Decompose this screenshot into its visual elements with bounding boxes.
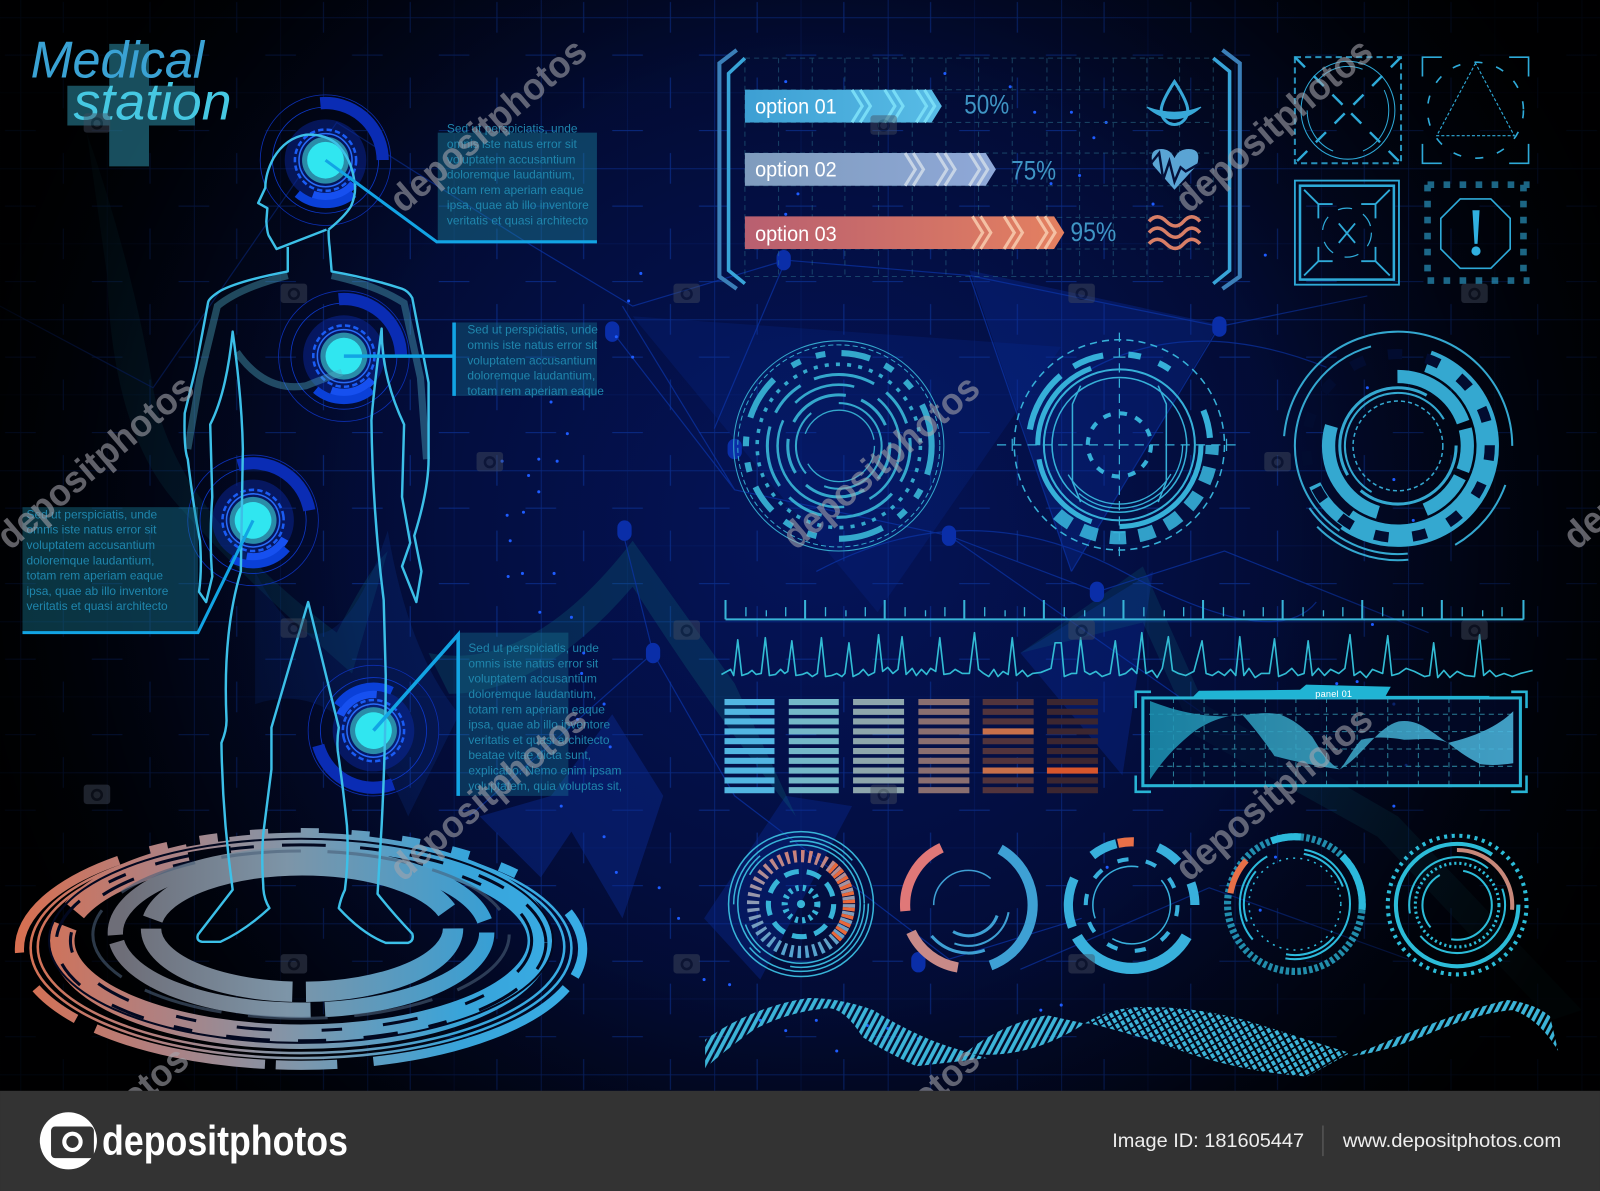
callout 3 text: ipsa, quae ab illo inventore (27, 584, 169, 598)
bar: option 03: option 03 (755, 222, 837, 246)
callout 4 text: Sed ut perspiciatis, unde (468, 641, 599, 655)
level bars (724, 702, 1098, 790)
stock watermark text: depositphotos (381, 29, 594, 220)
options panel (719, 50, 1240, 289)
stock watermark text: depositphotos (381, 698, 594, 889)
callout 3 text: Sed ut perspiciatis, unde (27, 507, 157, 521)
bar: option 03 (745, 216, 1064, 249)
ring gauge 3 (1043, 816, 1220, 994)
callout 3 text: veritatis et quasi architecto (27, 599, 168, 613)
callout 4 text: totam rem aperiam eaque (468, 702, 605, 716)
bar: option 01 (745, 90, 942, 122)
stock watermark text: depositphotos (1167, 29, 1380, 220)
callout 2 text: totam rem aperiam eaque (467, 384, 604, 398)
hub targets (177, 95, 453, 811)
callout 1 text: totam rem aperiam eaque (447, 183, 584, 197)
panel brackets (719, 50, 1240, 289)
gear gauge C (1254, 302, 1541, 589)
callout 1 (326, 122, 597, 242)
ring gauge 5 (1388, 836, 1527, 974)
level column 1 (724, 702, 774, 790)
network particles (502, 73, 1449, 1051)
target box: square (1295, 181, 1399, 285)
level column 3 (853, 702, 904, 790)
ECG trace (721, 633, 1533, 678)
callout 3 text: voluptatem accusantium (27, 538, 155, 552)
icon: waves (1149, 217, 1200, 248)
icon: heart (1151, 149, 1200, 190)
callout 4 text: explicabo. Nemo enim ipsam (468, 763, 622, 777)
callout 2 text: Sed ut perspiciatis, unde (467, 323, 598, 337)
callout 4 text: beatae vitae dicta sunt, (468, 748, 591, 762)
callout 4 text: doloremque laudantium, (468, 687, 596, 701)
title: Medical station: Medical (31, 32, 205, 90)
bar: option 01: option 01 (755, 94, 837, 118)
logo wordmark: depositphotos (102, 1117, 348, 1164)
ring gauge 1 (729, 832, 873, 977)
value 50%: 50% (964, 89, 1009, 119)
ruler (726, 600, 1523, 619)
level column 4 (918, 702, 969, 790)
callout 1 text: omnis iste natus error sit (447, 137, 577, 151)
callout 1 text: Sed ut perspiciatis, unde (447, 122, 578, 136)
callout 4 (373, 633, 622, 796)
site url: www.depositphotos.com (1342, 1130, 1561, 1152)
callout 3 (22, 507, 253, 633)
callout 1 text: veritatis et quasi architecto (447, 213, 588, 227)
shoulder and chest shading (188, 276, 427, 459)
ring gauge 2 (881, 817, 1056, 993)
crosshair gauge B (997, 333, 1242, 557)
ring gauge 4 (1200, 809, 1390, 999)
target box: triangle (1422, 57, 1529, 163)
callout 3 text: doloremque laudantium, (27, 553, 154, 567)
wave panel (1136, 685, 1527, 792)
stock watermark text: depositphotos (774, 366, 987, 557)
title: Medical station (31, 32, 232, 166)
warning box (1428, 185, 1530, 281)
callout 1 text: voluptatem accusantium (447, 152, 576, 166)
footer bar (0, 1091, 1600, 1191)
panel grid (745, 58, 1213, 277)
stock watermark cameras (84, 113, 1488, 973)
callout 1 text: doloremque laudantium, (447, 168, 575, 182)
icon: camera logo (40, 1112, 97, 1169)
image id: Image ID: 181605447 (1112, 1130, 1304, 1152)
level column 6 (1047, 702, 1098, 790)
bar: option 02: option 02 (755, 158, 837, 182)
title: Medical station: station (73, 73, 232, 131)
callout 1 text: ipsa, quae ab illo inventore (447, 198, 589, 212)
radial gauge A (734, 341, 944, 551)
callout 2 text: omnis iste natus error sit (467, 338, 598, 352)
panel inner brackets (729, 58, 1230, 284)
callout 3 text: omnis iste natus error sit (27, 523, 157, 537)
callout 3 text: totam rem aperiam eaque (27, 569, 163, 583)
callout 4 text: ipsa, quae ab illo inventore (468, 718, 611, 732)
callout 4 text: voluptatem, quia voluptas sit, (468, 779, 622, 793)
callout 4 text: veritatis et quasi architecto (468, 733, 610, 747)
callout 2 text: voluptatem accusantium (467, 353, 596, 367)
value 75%: 75% (1011, 156, 1056, 186)
bar: option 02 (745, 153, 996, 186)
human body outline (185, 135, 429, 943)
level column 5 (983, 702, 1034, 790)
stock watermark text: depositphotos (1167, 698, 1380, 889)
callout 4 text: omnis iste natus error sit (468, 656, 599, 670)
panel label: panel 01 (1315, 689, 1352, 699)
ribbon wave (1150, 701, 1513, 780)
target box: X (1295, 57, 1401, 163)
callout 4 text: voluptatem accusantium (468, 672, 597, 686)
icon: water drop (1147, 82, 1201, 124)
halftone wave ribbon (705, 998, 1558, 1077)
level column 2 (789, 702, 839, 790)
callout 2 text: doloremque laudantium, (467, 369, 595, 383)
callout 2 (344, 322, 604, 398)
medical cross (67, 44, 195, 166)
circular platform (19, 833, 583, 1065)
value 95%: 95% (1070, 217, 1116, 247)
